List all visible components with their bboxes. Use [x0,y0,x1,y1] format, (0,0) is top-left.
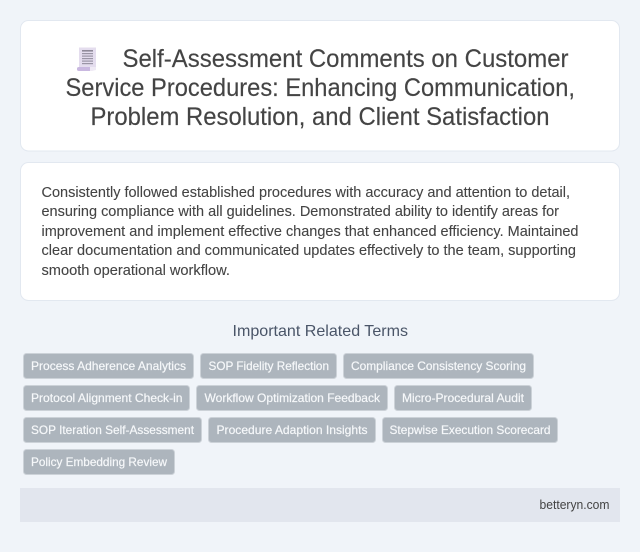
text block: comment body: improvement and implement effective changes that enhanced efficiency. Maintained [42,224,578,240]
title: Service Procedures: Enhancing Communication, [66,74,575,102]
text block: comment body: clear documentation and communicated updates effectively to the team, supporting [42,243,576,259]
tag: Policy Embedding Review [31,455,167,469]
tag: Workflow Optimization Feedback [204,391,381,405]
text block: comment body [42,185,578,279]
text block: comment body: smooth operational workflow. [42,263,230,279]
heading: important related terms: Important Related Terms [232,323,408,340]
tag [24,450,174,474]
tag [382,418,558,442]
footer [20,488,620,522]
tag: SOP Iteration Self-Assessment [31,423,195,437]
title: Self-Assessment Comments on Customer [122,45,568,73]
panel: title card [20,20,620,151]
footer source text: betteryn.com [540,498,610,512]
tag: Stepwise Execution Scorecard [390,423,550,437]
tag [24,354,194,378]
panel: related term tags [24,354,558,474]
tag [24,386,190,410]
text block: comment body: ensuring compliance with all guidelines. Demonstrated ability to identify areas for [42,204,559,220]
panel: self-assessment comment [20,162,620,300]
title: Problem Resolution, and Client Satisfaction [90,103,550,131]
text block: comment body: Consistently followed established procedures with accuracy and attention to detail, [42,185,570,201]
tag: Compliance Consistency Scoring [351,359,526,373]
tag [394,386,532,410]
title [66,45,575,131]
tag: Micro-Procedural Audit [402,391,525,405]
tag: Protocol Alignment Check-in [31,391,182,405]
tag: Procedure Adaption Insights [216,423,368,437]
tag: SOP Fidelity Reflection [208,359,329,373]
tag [344,354,534,378]
tag [208,418,376,442]
tag [196,386,388,410]
icon: receipt scroll [77,48,96,71]
tag: Process Adherence Analytics [31,359,186,373]
tag [200,354,336,378]
tag [24,418,202,442]
